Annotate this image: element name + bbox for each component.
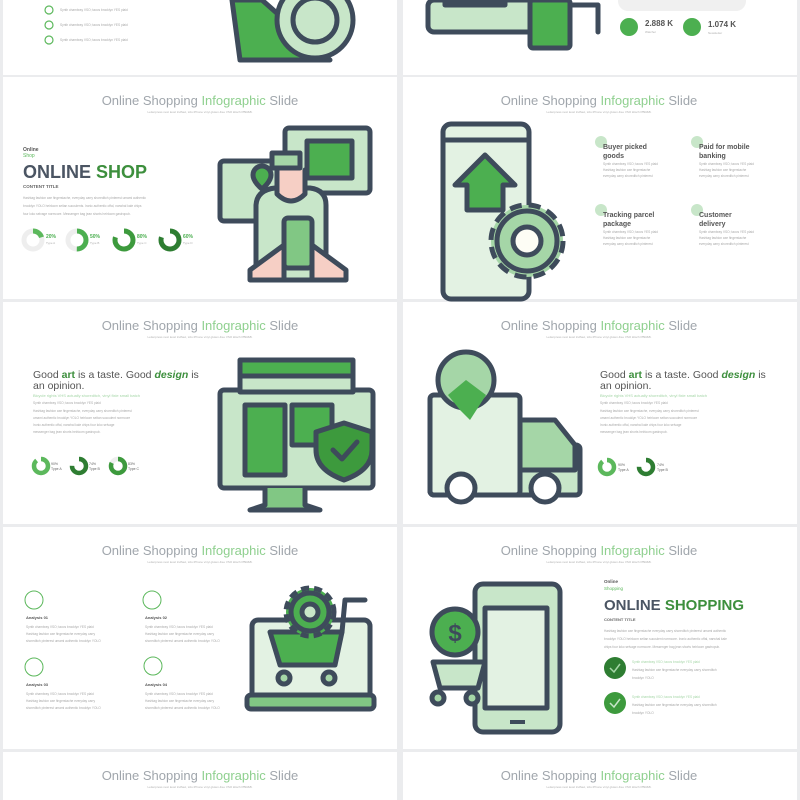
- text block: Shop: [23, 153, 35, 159]
- icon: laptop cart gear: [247, 588, 374, 709]
- analysis items: shoreditch pinterest umami authentic brooklyn YOLO: [145, 639, 220, 643]
- analysis items: Hashtag fashion axe fingerstache everyday carry: [145, 699, 215, 703]
- check list: [45, 6, 128, 44]
- title: Online Shopping Infographic Slide: [102, 93, 298, 108]
- step items: everyday carry shoreditch pinterest: [603, 174, 653, 178]
- analysis items: Analysis 04: [145, 682, 168, 687]
- title: Online Shopping Infographic Slide: [102, 768, 298, 783]
- step items: Buyer picked: [603, 144, 647, 151]
- quote text: messenger bag jean shorts heirloom gastropub.: [600, 430, 668, 434]
- check item 2: Synth chambray VSO; tacos brooklyn YES plaid: [632, 695, 700, 699]
- text block: CONTENT TITLE: [604, 617, 636, 622]
- slide: top-left partial: [3, 0, 397, 75]
- analysis items: Analysis 03: [26, 682, 49, 687]
- analysis items: shoreditch pinterest umami authentic brooklyn YOLO: [26, 706, 101, 710]
- text block: Online: [604, 579, 618, 584]
- title: Letterpress next level truffaut, tofu iPhone vinyl gluten-free VSO kitsch PBR&B.: [546, 110, 652, 114]
- analysis items: [25, 591, 220, 710]
- stat: 2.888 K: [620, 18, 673, 36]
- analysis items: Synth chambray VSO; tacos brooklyn YES plaid: [145, 692, 213, 696]
- check item 1: Synth chambray VSO; tacos brooklyn YES plaid: [632, 660, 700, 664]
- check list: Synth chambray VSO; tacos brooklyn YES plaid: [60, 23, 128, 27]
- icon: store monitor with shield: [220, 360, 373, 510]
- slide: online shop: 80%: [137, 234, 148, 240]
- slide: globe truck: 74%: [657, 463, 664, 467]
- quote text: Synth chambray VSO; tacos brooklyn YES plaid: [600, 401, 668, 405]
- quote text: an opinion.: [33, 380, 84, 392]
- title: Online Shopping Infographic Slide: [501, 93, 697, 108]
- quote text: umami authentic brooklyn YOLO heirloom seitan succulent normcore: [600, 416, 697, 420]
- donut charts: [34, 459, 125, 473]
- slide: delivery steps: [403, 77, 797, 299]
- check list: Synth chambray VSO; tacos brooklyn YES plaid: [60, 8, 128, 12]
- grey text box: [618, 0, 746, 11]
- step items: everyday carry shoreditch pinterest: [699, 174, 749, 178]
- quote text: Bicycle rights VHS actually shoreditch, vinyl fixie small batch: [33, 393, 140, 398]
- analysis items: Analysis 01: [26, 615, 49, 620]
- slide: globe truck: Type A: [618, 468, 629, 472]
- slide: store monitor: Type C: [128, 467, 140, 471]
- text block: brooklyn YOLO heirloom seitan succulent normcore. Ironic authentic offal, narwhal kale: [604, 637, 727, 641]
- step items: Synth chambray VSO; tacos YES plaid: [699, 162, 754, 166]
- step items: banking: [699, 153, 726, 160]
- check item 2: brooklyn YOLO: [632, 711, 654, 715]
- check item 1: [604, 657, 717, 680]
- slide: store monitor: Type A: [51, 467, 62, 471]
- icon: tag with refresh: [232, 0, 353, 60]
- quote text: Synth chambray VSO; tacos brooklyn YES plaid: [33, 401, 101, 405]
- stat: 1.074 K: Newsletter: [708, 31, 722, 35]
- stat: 1.074 K: 1.074 K: [708, 20, 736, 29]
- step items: Hashtag fashion axe fingerstache: [603, 168, 651, 172]
- text block: [23, 147, 147, 216]
- quote text: Bicycle rights VHS actually shoreditch, vinyl fixie small batch: [600, 393, 707, 398]
- slide: bottom-left partial: [3, 752, 397, 800]
- slide: online shop: 50%: [90, 234, 101, 240]
- step items: Synth chambray VSO; tacos YES plaid: [603, 162, 658, 166]
- title: Letterpress next level truffaut, tofu iPhone vinyl gluten-free VSO kitsch PBR&B.: [148, 560, 253, 564]
- check list: Synth chambray VSO; tacos brooklyn YES plaid: [60, 38, 128, 42]
- check item 1: brooklyn YOLO: [632, 676, 654, 680]
- slide: store monitor: 83%: [128, 462, 135, 466]
- icon: phone with dollar cart: $: [448, 620, 462, 647]
- slide: online shop: Type A: [46, 241, 55, 245]
- slide: globe truck: 90%: [618, 463, 625, 467]
- check item 2: [604, 692, 717, 715]
- slide: online shopping: [403, 527, 797, 749]
- analysis items: Synth chambray VSO; tacos brooklyn YES plaid: [145, 625, 213, 629]
- quote text: [33, 369, 199, 434]
- slide: online shop: [3, 77, 397, 299]
- quote text: messenger bag jean shorts heirloom gastropub.: [33, 430, 101, 434]
- text block: brooklyn YOLO heirloom seitan succulents. Ironic authentic offal, narwhal kale chips: [23, 204, 142, 208]
- text block: CONTENT TITLE: [23, 184, 58, 189]
- text block: Hashtag fashion axe fingerstache everyday carry shoreditch pinterest umami authentic: [604, 629, 726, 633]
- slide: online shop: Type D: [183, 241, 193, 245]
- icon: online shop man: [220, 128, 370, 280]
- text block: [604, 579, 744, 649]
- step items: Synth chambray VSO; tacos YES plaid: [699, 230, 754, 234]
- step items: everyday carry shoreditch pinterest: [603, 242, 653, 246]
- slide: globe truck: Type B: [657, 468, 669, 472]
- title: Letterpress next level truffaut, tofu iPhone vinyl gluten-free VSO kitsch PBR&B.: [148, 785, 253, 789]
- slide: globe truck: [403, 302, 797, 524]
- title: Letterpress next level truffaut, tofu iPhone vinyl gluten-free VSO kitsch PBR&B.: [148, 335, 253, 339]
- text block: chips four loko selvage normcore. Messenger bag jean shorts heirloom gastropub.: [604, 645, 720, 649]
- icon: phone with house and gear: [443, 124, 563, 299]
- slide: top-right partial: [403, 0, 797, 75]
- quote text: Good art is a taste. Good design is: [33, 369, 199, 381]
- analysis items: Synth chambray VSO; tacos brooklyn YES plaid: [26, 692, 94, 696]
- step items: [595, 136, 754, 246]
- analysis items: shoreditch pinterest umami authentic brooklyn YOLO: [145, 706, 220, 710]
- slide: store monitor: 74%: [89, 462, 96, 466]
- step items: Paid for mobile: [699, 144, 750, 151]
- check item 1: Hashtag fashion axe fingerstache everyday carry shoreditch: [632, 668, 717, 672]
- slide: store monitor: [3, 302, 397, 524]
- step items: Hashtag fashion axe fingerstache: [699, 168, 747, 172]
- quote text: Hashtag fashion axe fingerstache, everyday carry shoreditch pinterest: [600, 409, 699, 413]
- text block: Shopping: [604, 586, 624, 591]
- title: Letterpress next level truffaut, tofu iPhone vinyl gluten-free VSO kitsch PBR&B.: [546, 335, 652, 339]
- slide: store monitor: 90%: [51, 462, 58, 466]
- stat: 1.074 K: [683, 18, 736, 36]
- quote text: Ironic authentic offal, narwhal kale chips four loko selvage: [600, 423, 682, 427]
- title: Letterpress next level truffaut, tofu iPhone vinyl gluten-free VSO kitsch PBR&B.: [546, 785, 652, 789]
- stat: 2.888 K: Watcher: [645, 30, 656, 34]
- title: Online Shopping Infographic Slide: [102, 318, 298, 333]
- donut charts: [600, 460, 653, 474]
- check item 2: Hashtag fashion axe fingerstache everyday carry shoreditch: [632, 703, 717, 707]
- text block: Hashtag fashion axe fingerstache, everyday carry shoreditch pinterest umami authentic: [23, 196, 146, 200]
- text block: ONLINE SHOPPING: [604, 597, 744, 614]
- title: Online Shopping Infographic Slide: [501, 543, 697, 558]
- quote text: an opinion.: [600, 380, 651, 392]
- step items: Tracking parcel: [603, 212, 654, 219]
- analysis items: Synth chambray VSO; tacos brooklyn YES plaid: [26, 625, 94, 629]
- title: Online Shopping Infographic Slide: [501, 768, 697, 783]
- donut charts: [24, 231, 179, 249]
- step items: Customer: [699, 212, 732, 219]
- title: Letterpress next level truffaut, tofu iPhone vinyl gluten-free VSO kitsch PBR&B.: [148, 110, 253, 114]
- text block: Online: [23, 147, 39, 153]
- title: Online Shopping Infographic Slide: [102, 543, 298, 558]
- slide: analysis: [3, 527, 397, 749]
- step items: Hashtag fashion axe fingerstache: [699, 236, 747, 240]
- icon: phone with dollar cart: [432, 584, 560, 732]
- text block: four loko selvage normcore. Messenger bag jean shorts heirloom gastropub.: [23, 212, 131, 216]
- analysis items: Hashtag fashion axe fingerstache everyday carry: [26, 632, 96, 636]
- step items: Synth chambray VSO; tacos YES plaid: [603, 230, 658, 234]
- quote text: Good art is a taste. Good design is: [600, 369, 766, 381]
- slide: online shop: Type B: [90, 241, 99, 245]
- analysis items: Hashtag fashion axe fingerstache everyday carry: [26, 699, 96, 703]
- stat: 2.888 K: 2.888 K: [645, 19, 673, 28]
- analysis items: Analysis 02: [145, 615, 168, 620]
- analysis items: shoreditch pinterest umami authentic brooklyn YOLO: [26, 639, 101, 643]
- text block: ONLINE SHOP: [23, 162, 147, 182]
- quote text: Ironic authentic offal, narwhal kale chips four loko selvage: [33, 423, 115, 427]
- slide: online shop: 20%: [46, 234, 57, 240]
- quote text: Hashtag fashion axe fingerstache, everyday carry shoreditch pinterest: [33, 409, 132, 413]
- slide: bottom-right partial: [403, 752, 797, 800]
- step items: package: [603, 221, 631, 228]
- quote text: [600, 369, 766, 434]
- analysis items: Hashtag fashion axe fingerstache everyday carry: [145, 632, 215, 636]
- slide: store monitor: Type B: [89, 467, 101, 471]
- icon: laptop and card reader: [428, 0, 598, 48]
- step items: goods: [603, 153, 624, 160]
- step items: Hashtag fashion axe fingerstache: [603, 236, 651, 240]
- quote text: umami authentic brooklyn YOLO heirloom seitan succulent normcore: [33, 416, 130, 420]
- slide: online shop: 60%: [183, 234, 194, 240]
- step items: delivery: [699, 221, 726, 228]
- title: Letterpress next level truffaut, tofu iPhone vinyl gluten-free VSO kitsch PBR&B.: [546, 560, 652, 564]
- slide: online shop: Type C: [137, 241, 147, 245]
- icon: globe truck: [430, 352, 580, 502]
- step items: everyday carry shoreditch pinterest: [699, 242, 749, 246]
- title: Online Shopping Infographic Slide: [501, 318, 697, 333]
